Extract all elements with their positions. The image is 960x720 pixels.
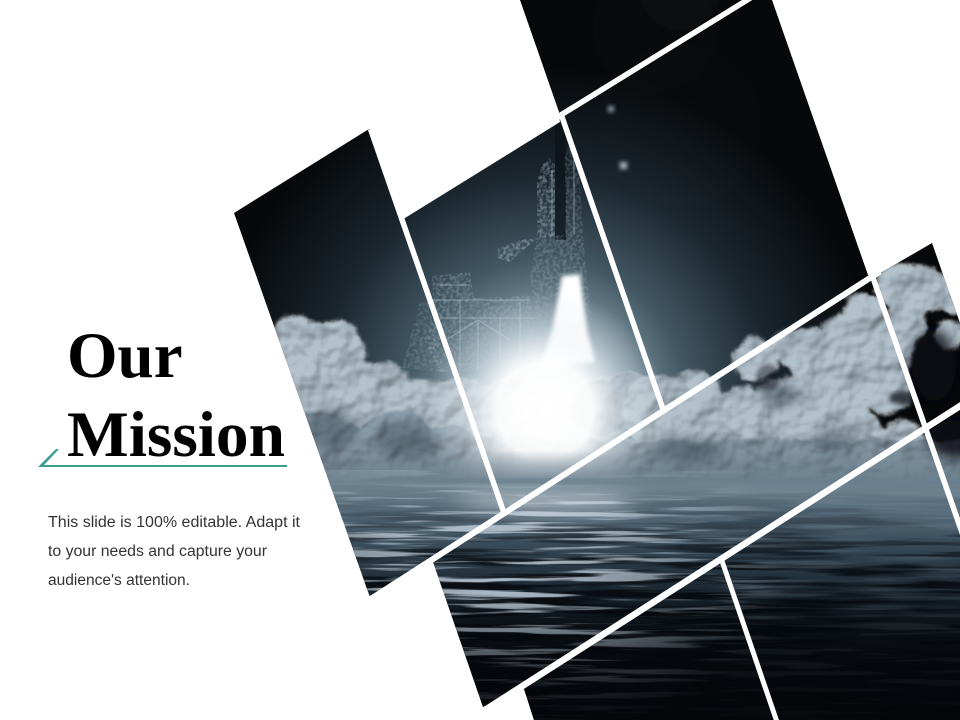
body text: This slide is 100% editable. Adapt it	[48, 514, 301, 531]
exhaust plume	[540, 274, 595, 368]
cloud bank	[250, 261, 960, 499]
title underline accent	[38, 449, 287, 467]
dark cloud shadows	[756, 329, 960, 460]
lens flares	[605, 103, 630, 172]
night sky with launch glow	[220, 0, 960, 520]
launch glow over clouds	[434, 296, 657, 478]
space shuttle and launch tower	[402, 120, 592, 375]
title	[67, 320, 285, 471]
title: Our	[67, 320, 183, 392]
horizon mist	[324, 452, 960, 497]
body text: audience's attention.	[48, 572, 190, 589]
white dividing lines between photo panels	[360, 0, 960, 720]
soft cloud shading	[302, 383, 859, 464]
body text: to your needs and capture your	[48, 543, 267, 560]
body text	[48, 514, 301, 589]
title: Mission	[67, 399, 285, 471]
photo collage: rocket launch above clouds and water	[220, 0, 960, 720]
water surface	[300, 466, 960, 720]
